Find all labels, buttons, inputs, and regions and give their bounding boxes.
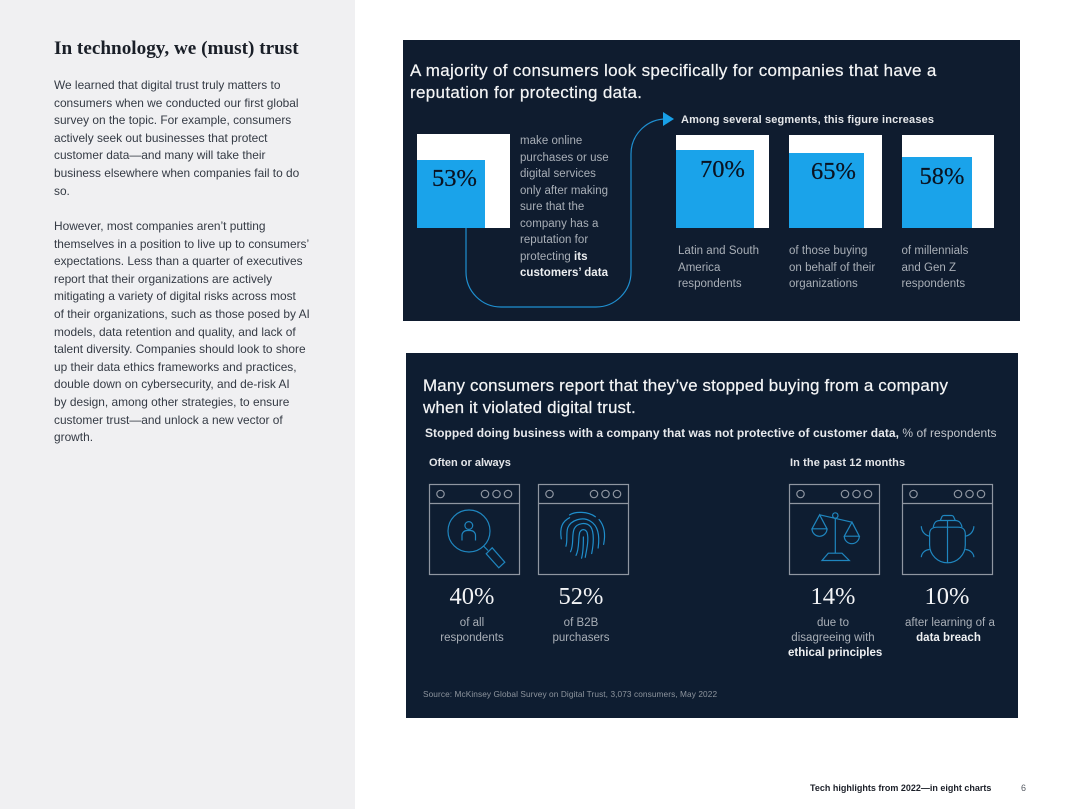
icon: magnifying glass over person in window <box>428 484 520 576</box>
text block: first paragraph: consumers when we conducted our first global <box>54 96 299 110</box>
text block: second paragraph: report that their organizations are actively <box>54 272 272 286</box>
value: 58%: 58% <box>920 162 964 190</box>
text block: second paragraph: models, data retention and quality, and lack of <box>54 325 296 339</box>
heading: In technology, we (must) trust: In technology, we (must) trust <box>54 38 299 59</box>
text block: 53% description: purchases or use <box>520 152 609 164</box>
caption: 70% <box>678 245 759 290</box>
text block: first paragraph: customer data—and many will take their <box>54 148 265 162</box>
text block: second paragraph: double down on cybersecurity, and de-risk AI <box>54 377 290 391</box>
bar chart: 58% <box>902 134 994 228</box>
bar fill <box>902 156 972 228</box>
stat: 14% due to disagreeing with ethical principles <box>788 583 882 659</box>
bar chart: 65% <box>789 134 882 228</box>
text block: second paragraph: However, most companies aren’t putting <box>54 219 266 233</box>
text block: second paragraph: up their data ethics frameworks and practices, <box>54 360 297 374</box>
caption: 65%: on behalf of their <box>789 262 875 274</box>
text block: 53% description: reputation for <box>520 234 588 246</box>
text block: 53% description: make online <box>520 135 582 147</box>
caption: of all <box>460 617 484 629</box>
caption: 70%: respondents <box>678 278 742 290</box>
footer: publication title: Tech highlights from 2022—in eight charts <box>810 783 991 793</box>
caption: 65% <box>789 245 875 290</box>
icon: fingerprint in window <box>538 484 630 576</box>
icon: bug in window <box>902 484 994 576</box>
caption: 58% <box>902 245 968 290</box>
panel heading: A majority of consumers look specifically for companies that have a <box>410 61 937 80</box>
text block: first paragraph: so. <box>54 184 70 198</box>
caption: due to <box>817 617 849 629</box>
text block: second paragraph: growth. <box>54 430 93 444</box>
value: 70%: 70% <box>700 156 745 182</box>
caption: disagreeing with <box>791 632 875 644</box>
text block: second paragraph: of their organizations, such as those posed by AI <box>54 307 310 321</box>
caption: after learning of a <box>905 617 995 629</box>
bar fill <box>789 152 864 228</box>
caption: 70%: America <box>678 262 720 274</box>
panel heading: when it violated digital trust. <box>423 398 636 417</box>
caption: 58%: respondents <box>902 278 965 290</box>
text block: second paragraph: mitigating a variety of digital risks across most <box>54 289 296 303</box>
caption: ethical principles <box>788 647 882 659</box>
text block: second paragraph: expectations. Less than a quarter of executives <box>54 254 303 268</box>
stat: 10% after learning of a data breach <box>905 583 995 644</box>
text block: second paragraph: talent diversity. Companies should look to shore <box>54 342 306 356</box>
text block: second paragraph: themselves in a position to live up to consumers’ <box>54 237 309 251</box>
bar fill <box>417 160 484 228</box>
footer: page number: 6 <box>1021 783 1026 793</box>
text block: first paragraph: business elsewhere when companies fail to do <box>54 166 299 180</box>
value: 53%: 53% <box>432 165 477 192</box>
icon: scales in window <box>788 484 880 576</box>
label: past 12 months: In the past 12 months <box>790 457 905 469</box>
subheading: segments: Among several segments, this figure increases <box>681 114 934 126</box>
chart subtitle: Stopped doing business with a company that was not protective of customer data, % of respondents <box>425 426 997 440</box>
value: 65%: 65% <box>811 158 856 184</box>
panel: left sidebar <box>0 0 355 809</box>
text block: 53% description: customers’ data <box>520 267 608 279</box>
text block: first paragraph: We learned that digital trust truly matters to <box>54 78 280 92</box>
bar chart: 70% <box>676 134 768 228</box>
value: 10% <box>925 583 969 610</box>
text block: 53% description: digital services <box>520 168 596 180</box>
text block: second paragraph <box>54 219 310 444</box>
text block: 53% description: company has a <box>520 218 598 230</box>
text block: 53% description: only after making <box>520 184 608 196</box>
text block: second paragraph: by design, among other strategies, to ensure <box>54 395 289 409</box>
caption <box>552 617 610 644</box>
text block: 53% description: protecting its <box>520 250 588 262</box>
arrow: connector from 53% to segments <box>465 112 674 308</box>
text block: first paragraph: survey on the topic. For example, consumers <box>54 113 291 127</box>
panel heading: Many consumers report that they’ve stopped buying from a company <box>423 376 948 395</box>
caption <box>440 617 504 644</box>
caption: of B2B <box>564 617 598 629</box>
value: 52% <box>559 583 603 610</box>
text block: second paragraph: customer trust—and unlock a new vector of <box>54 413 283 427</box>
text block: 53% description <box>520 135 609 279</box>
caption: 65%: organizations <box>789 278 858 290</box>
panel: consumers look for companies protecting data <box>403 40 1020 321</box>
panel heading: reputation for protecting data. <box>410 83 642 102</box>
bar fill <box>676 150 754 228</box>
stat: 52% of B2B purchasers <box>552 583 610 644</box>
caption <box>905 617 995 644</box>
caption: purchasers <box>552 632 610 644</box>
label: often or always: Often or always <box>429 457 511 469</box>
caption <box>788 617 882 659</box>
caption: respondents <box>440 632 504 644</box>
panel heading <box>410 61 937 102</box>
value: 14% <box>811 583 855 610</box>
text block: first paragraph: actively seek out businesses that protect <box>54 131 268 145</box>
caption: data breach <box>916 632 981 644</box>
text block: 53% description: sure that the <box>520 201 584 213</box>
value: 40% <box>450 583 494 610</box>
panel: consumers stopped buying <box>406 353 1018 718</box>
caption: 58%: of millennials <box>902 245 968 257</box>
caption: 70%: Latin and South <box>678 245 759 257</box>
panel heading <box>422 376 948 417</box>
bar chart: 53% <box>417 134 510 228</box>
stat: 40% of all respondents <box>440 583 504 644</box>
text block: first paragraph <box>54 78 299 198</box>
caption: 58%: and Gen Z <box>902 262 956 274</box>
caption: 65%: of those buying <box>789 245 867 257</box>
source note: Source: McKinsey Global Survey on Digital Trust, 3,073 consumers, May 2022 <box>423 689 717 699</box>
